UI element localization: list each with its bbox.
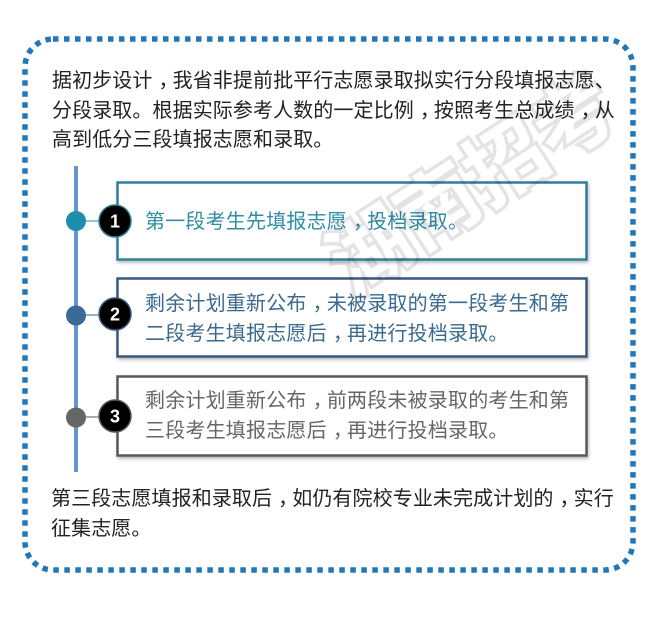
closing paragraph: 征集志愿。 [51, 517, 152, 540]
intro paragraph: 据初步设计 ，我省非提前批平行志愿录取拟实行分段填报志愿、 [52, 69, 615, 92]
step 3 marker: 3 [110, 406, 120, 426]
step 3 text: 剩余计划重新公布 ，前两段未被录取的考生和第 [145, 389, 569, 412]
intro paragraph: 高到低分三段填报志愿和录取。 [52, 128, 333, 151]
step 2 text: 二段考生填报志愿后 ，再进行投档录取。 [145, 322, 509, 345]
timeline with three steps [66, 166, 586, 472]
watermark: 湖南招考 [313, 59, 633, 310]
step 2 marker: 2 [110, 304, 120, 324]
closing paragraph: 第三段志愿填报和录取后 ，如仍有院校专业未完成计划的 ，实行 [51, 487, 614, 510]
step 1 text: 第一段考生先填报志愿 ，投档录取。 [145, 210, 468, 233]
step 1 box [118, 182, 586, 260]
intro paragraph [52, 69, 615, 151]
dotted rounded frame [25, 39, 633, 570]
step 2 text: 剩余计划重新公布 ，未被录取的第一段考生和第 [145, 292, 569, 315]
step 3 frame [118, 376, 586, 456]
step 2 frame [118, 278, 586, 356]
step 1 frame [118, 182, 586, 260]
step 2 text [145, 292, 569, 345]
step 3 text: 三段考生填报志愿后 ，再进行投档录取。 [145, 419, 509, 442]
step 2 box [118, 278, 586, 356]
step 1 marker [66, 205, 131, 237]
step 3 box [118, 376, 586, 456]
step 3 text [145, 389, 569, 442]
step 3 marker [66, 400, 131, 432]
closing paragraph [51, 487, 614, 540]
intro paragraph: 分段录取。根据实际参考人数的一定比例 ，按照考生总成绩 ，从 [52, 99, 615, 122]
timeline vertical line [74, 166, 78, 472]
step 1 marker: 1 [110, 212, 120, 232]
step 2 marker [66, 298, 131, 330]
